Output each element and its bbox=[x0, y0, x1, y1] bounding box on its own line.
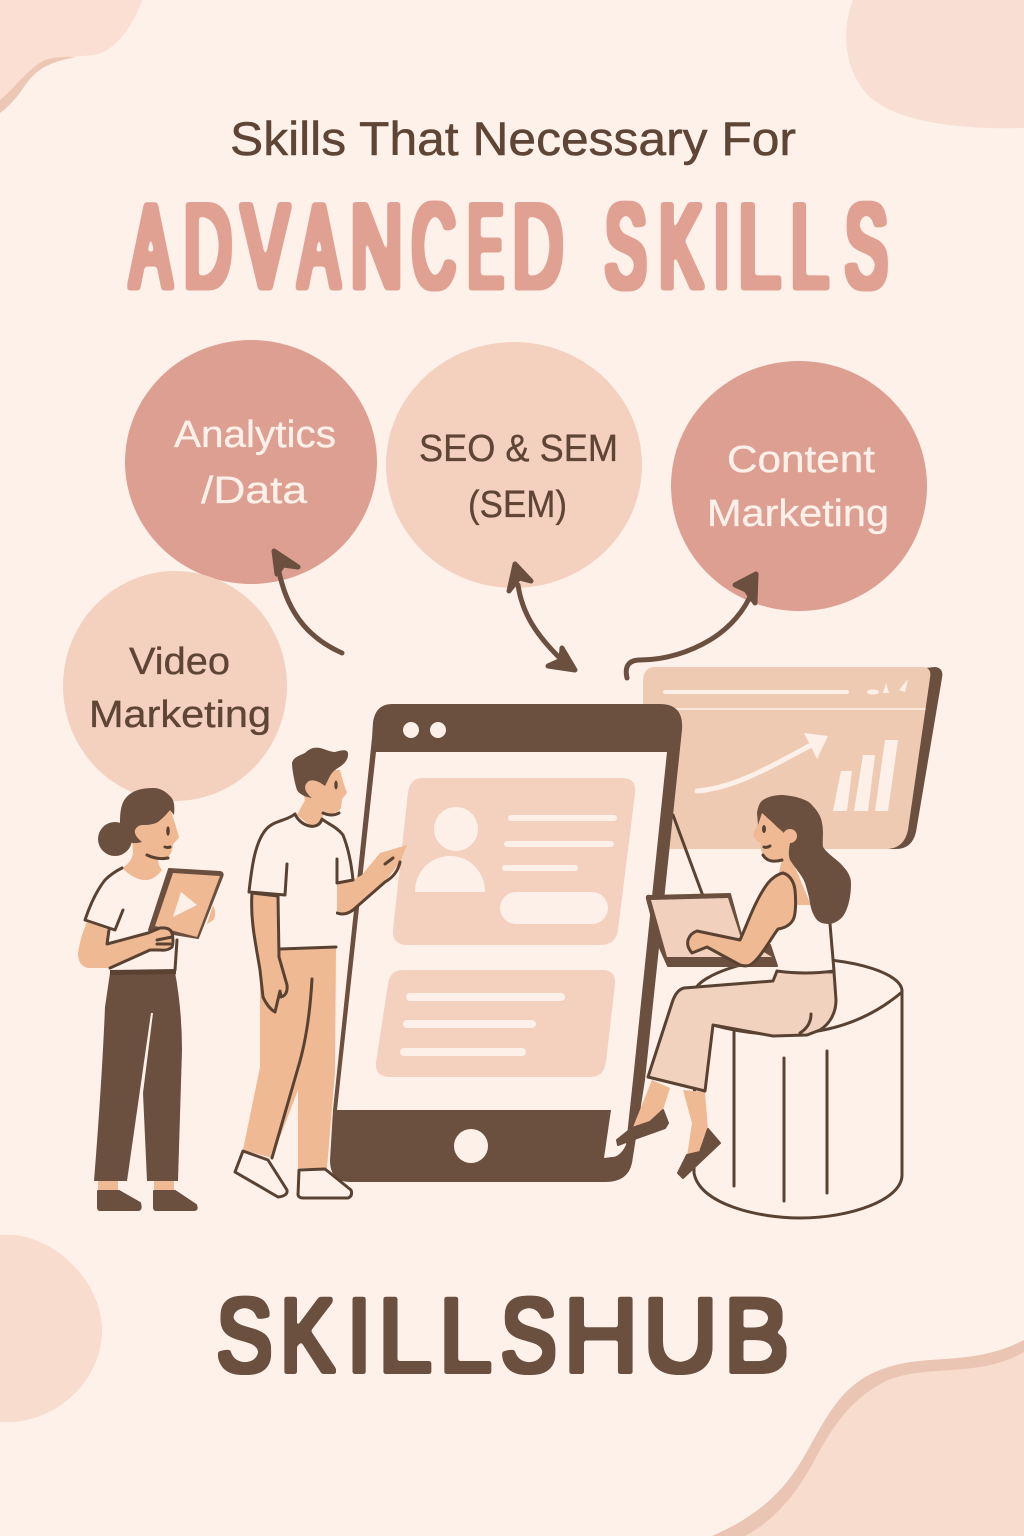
bubble: Content Marketing: Marketing bbox=[707, 493, 889, 535]
heading: ADVANCED SKILLS: D bbox=[512, 180, 563, 314]
bubble: Video Marketing: Marketing bbox=[89, 694, 271, 736]
bubble: Analytics/Data: /Data bbox=[201, 470, 308, 512]
arm bbox=[688, 873, 796, 966]
top bbox=[767, 880, 834, 972]
heading: ADVANCED SKILLS: K bbox=[659, 180, 702, 314]
face and neck bbox=[122, 808, 179, 880]
heading: ADVANCED SKILLS: I bbox=[715, 180, 728, 314]
monitor: dashboard bbox=[643, 667, 942, 849]
blob: bottom left corner bbox=[0, 1235, 102, 1422]
icon: growth arrow bbox=[697, 733, 828, 791]
man face details bbox=[323, 780, 339, 815]
brand: SKILLSHUB: L bbox=[378, 1278, 432, 1394]
legs bbox=[633, 1080, 708, 1156]
arrow: to Analytics bbox=[274, 551, 342, 653]
brand: SKILLSHUB: H bbox=[563, 1278, 639, 1394]
brand: SKILLSHUB: I bbox=[347, 1278, 371, 1394]
heading: ADVANCED SKILLS: D bbox=[184, 180, 232, 314]
brand: SKILLSHUB bbox=[216, 1278, 789, 1394]
bubble: SEO & SEM: SEO & SEM bbox=[419, 428, 618, 470]
hair bbox=[98, 788, 174, 856]
blob: top right corner bbox=[846, 0, 1024, 128]
phone bbox=[330, 704, 682, 1182]
heading: subtitle: Skills That Necessary For bbox=[230, 112, 796, 165]
brand: SKILLSHUB: S bbox=[501, 1278, 557, 1394]
heading: ADVANCED SKILLS: A bbox=[299, 180, 339, 314]
arm bbox=[78, 922, 173, 968]
shoes bbox=[617, 1110, 720, 1178]
face and neck bbox=[297, 770, 347, 828]
pants bbox=[94, 972, 182, 1181]
brand: SKILLSHUB: K bbox=[280, 1278, 335, 1394]
trousers bbox=[243, 947, 336, 1168]
bubble: Content Marketing bbox=[671, 361, 927, 611]
arrow: double-headed to SEO bbox=[509, 564, 575, 670]
brand: SKILLSHUB: B bbox=[724, 1278, 789, 1394]
heading: ADVANCED SKILLS: S bbox=[845, 180, 887, 314]
bubble: Video Marketing bbox=[63, 571, 287, 801]
bubble: Analytics/Data bbox=[125, 340, 377, 584]
brand: SKILLSHUB: U bbox=[643, 1278, 718, 1394]
shirt bbox=[85, 868, 178, 972]
heading: ADVANCED SKILLS: E bbox=[468, 180, 503, 314]
icon: window controls bbox=[867, 679, 908, 694]
bubble: Content Marketing: Content bbox=[727, 439, 875, 481]
shoes bbox=[235, 1151, 352, 1198]
right arm bbox=[337, 845, 407, 914]
blob: bottom right corner bbox=[712, 1340, 1024, 1536]
face and neck bbox=[753, 813, 811, 905]
heading: ADVANCED SKILLS bbox=[130, 180, 887, 314]
heading: ADVANCED SKILLS: V bbox=[242, 180, 289, 314]
blob: top left corner bbox=[0, 0, 142, 113]
monitor stand bbox=[673, 815, 703, 896]
brand: SKILLSHUB: S bbox=[216, 1278, 272, 1394]
heading: ADVANCED SKILLS: A bbox=[130, 180, 171, 314]
heading: ADVANCED SKILLS: C bbox=[412, 180, 455, 314]
icon: bar chart bbox=[833, 740, 898, 811]
person: woman with tablet bbox=[78, 788, 223, 1210]
bubble: SEO & SEM: (SEM) bbox=[468, 484, 567, 526]
heading: ADVANCED SKILLS: N bbox=[350, 180, 403, 314]
bubble: Analytics/Data: Analytics bbox=[174, 414, 336, 456]
stool bbox=[694, 958, 902, 1218]
person: woman on laptop bbox=[617, 795, 851, 1178]
tablet bbox=[149, 869, 223, 938]
profile card bbox=[393, 778, 635, 945]
laptop bbox=[647, 894, 777, 966]
brand: SKILLSHUB: L bbox=[439, 1278, 492, 1394]
ankles bbox=[98, 1181, 174, 1192]
ear bbox=[783, 829, 797, 843]
hair bbox=[757, 795, 851, 924]
phone camera dots bbox=[403, 722, 446, 738]
text card bbox=[376, 970, 615, 1077]
shirt bbox=[249, 814, 353, 949]
heading: ADVANCED SKILLS: L bbox=[738, 180, 780, 314]
home button bbox=[454, 1129, 488, 1163]
shoes bbox=[98, 1191, 197, 1210]
left arm bbox=[252, 893, 287, 1012]
bubble: Video Marketing: Video bbox=[129, 641, 230, 683]
bubble: SEO & SEM bbox=[386, 342, 642, 588]
trousers bbox=[648, 971, 836, 1091]
person: man pointing bbox=[235, 748, 407, 1198]
arrow: to Content Marketing bbox=[626, 574, 756, 678]
far hand bbox=[207, 905, 215, 924]
hair bbox=[292, 748, 348, 798]
heading: ADVANCED SKILLS: L bbox=[791, 180, 828, 314]
woman face details bbox=[147, 826, 170, 859]
heading: ADVANCED SKILLS: S bbox=[605, 180, 646, 314]
face details bbox=[762, 825, 782, 861]
